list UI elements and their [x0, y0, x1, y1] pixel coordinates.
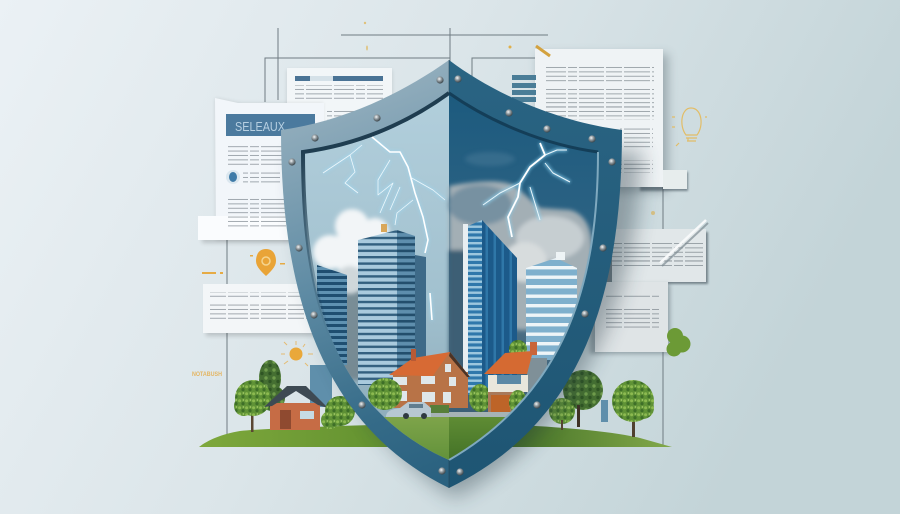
storm cloud: right — [446, 178, 592, 366]
shield rim: right half — [449, 60, 622, 488]
shield — [281, 60, 622, 488]
house: small left — [264, 386, 328, 430]
document: SELEAUX sheet — [198, 98, 324, 243]
cloud: left — [313, 209, 389, 294]
rim centre crease — [448, 60, 450, 488]
lawn: left — [384, 417, 449, 460]
bush — [509, 390, 526, 410]
header banner — [226, 114, 315, 136]
banner title: SELEAUX — [235, 119, 285, 134]
tower: pale right — [526, 252, 577, 360]
tree: left double — [234, 360, 285, 432]
document: top right with pencil — [535, 46, 688, 192]
lightning: right — [483, 143, 570, 237]
frame lines behind the documents — [227, 28, 663, 447]
document: lower right sheet — [590, 282, 670, 354]
orange caption: NOTABUSH — [192, 372, 222, 378]
shield rim: left half — [281, 60, 449, 488]
house: centre — [389, 349, 470, 408]
icon: orange location pin — [256, 249, 276, 276]
tree: in shield left — [368, 378, 402, 410]
icon: light bulb — [672, 108, 707, 146]
tree: by centre — [469, 384, 488, 412]
tree: behind right house — [509, 340, 527, 353]
sky: right half — [449, 96, 550, 412]
car — [386, 402, 431, 419]
pencil tip — [536, 46, 550, 56]
dark top cloud band: right — [465, 152, 515, 166]
lightning: left — [323, 137, 445, 320]
rivets — [288, 75, 616, 476]
document: lower right with pen — [580, 220, 708, 284]
sky: left half — [300, 90, 449, 465]
trees: right group — [549, 370, 654, 437]
document: top centre — [287, 68, 392, 126]
tower: dark right — [463, 220, 517, 395]
round badge icon — [226, 170, 240, 184]
window scene — [300, 90, 601, 467]
bush: shield side — [321, 396, 355, 429]
small gold accents — [364, 22, 655, 215]
document: lower left — [203, 284, 324, 336]
icon: leaf — [666, 328, 690, 356]
icon: sun — [281, 341, 313, 366]
house: right — [484, 342, 547, 413]
ground: grass strip — [199, 424, 672, 447]
lawn: right — [449, 417, 505, 459]
blue stripes on the back sheet — [512, 75, 536, 102]
distant blue building — [310, 365, 332, 407]
rim inner edges — [303, 93, 598, 460]
road — [431, 412, 510, 417]
shield shadow — [295, 150, 642, 498]
left grey haze — [344, 290, 358, 382]
tower: back left — [317, 265, 347, 365]
orange dash marks — [202, 255, 285, 274]
pen — [660, 220, 708, 266]
tower: main left — [358, 224, 426, 385]
